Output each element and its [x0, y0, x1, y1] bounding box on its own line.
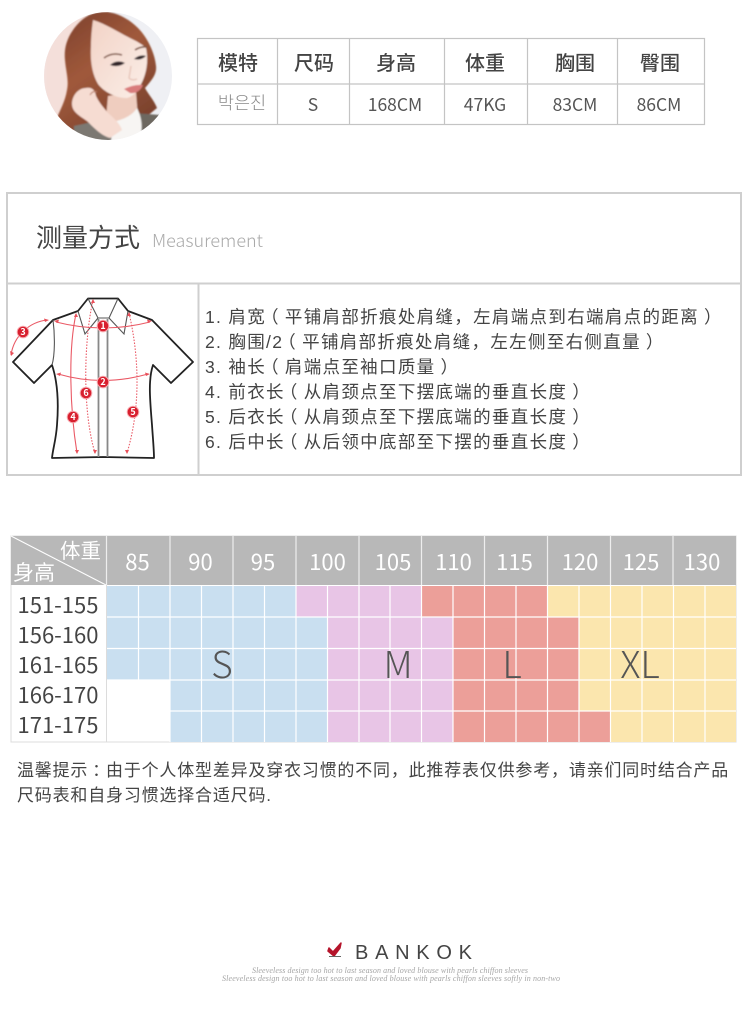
chart header: weight: 体重 [60, 534, 101, 564]
panel: measurement [7, 193, 741, 475]
brand logo: Sleeveless design too hot to last season and loved blouse with pearls chiffon sleeves [252, 966, 528, 975]
chart header: weight: 105 [375, 545, 411, 577]
table header row: 体重 [465, 47, 505, 76]
chart row labels: height: 151-155 [18, 588, 98, 620]
brand logo [222, 942, 560, 983]
zone: size L [422, 586, 610, 742]
table value row [218, 90, 681, 117]
measurement list: 3. 袖长（ 肩端点至袖口质量 ） [205, 357, 459, 377]
measurement list: 1. 肩宽（ 平铺肩部折痕处肩缝，左肩端点到右端肩点的距离 ） [205, 307, 723, 327]
shirt tweed right [140, 112, 159, 131]
chart row labels: height: 156-160 [18, 618, 98, 650]
table value row: S [308, 92, 318, 117]
chart row labels: height: 171-175 [18, 708, 98, 740]
chart row labels: height [18, 588, 98, 740]
diagram: shirt measurement points [10, 298, 193, 458]
brand logo: Sleeveless design too hot to last season and loved blouse with pearls chiffon sleeves softly in non-two [222, 974, 560, 983]
diagram: shirt measurement points: 1 [100, 319, 106, 332]
chart header: weight: 110 [435, 545, 472, 577]
chart header: weight: 90 [188, 545, 213, 577]
size letters: M [383, 635, 413, 689]
diagram: shirt measurement points: 3 [20, 325, 26, 338]
chart header: weight: 85 [125, 545, 150, 577]
chart header: weight [11, 534, 736, 587]
table header row [218, 47, 680, 76]
size letters [211, 635, 660, 689]
table header row: 模特 [218, 47, 258, 76]
zone: size S [107, 586, 327, 742]
size letters: L [502, 635, 522, 689]
measurement list: 4. 前衣长（ 从肩颈点至下摆底端的垂直长度 ） [205, 382, 591, 402]
chart header: weight: 115 [496, 545, 533, 577]
measurement list: 6. 后中长（ 从后领中底部至下摆的垂直长度 ） [205, 432, 591, 452]
table value row: 86CM [637, 92, 681, 117]
note text: 尺码表和自身习惯选择合适尺码. [17, 786, 271, 805]
heading: measurement: 测量方式 [36, 218, 140, 255]
table value row: 83CM [553, 92, 597, 117]
zone: size M [296, 586, 453, 742]
diagram: shirt measurement points: 6 [83, 386, 89, 399]
chart header: weight: 130 [684, 545, 720, 577]
size chart [11, 534, 736, 742]
table value row: 168CM [368, 92, 422, 117]
heading: measurement [36, 218, 264, 255]
shirt tweed left [73, 122, 112, 140]
hair [56, 12, 157, 132]
icon: check mark box [328, 943, 341, 956]
measurement list: 2. 胸围/2（ 平铺肩部折痕处肩缝，左左侧至右侧直量 ） [205, 332, 665, 352]
table header row: 臀围 [640, 47, 680, 76]
size letters: XL [620, 635, 660, 689]
table value row: 박은진 [218, 90, 266, 115]
heading: measurement: Measurement [152, 227, 264, 253]
table value row: 47KG [464, 92, 506, 117]
measurement list: 5. 后衣长（ 从肩颈点至下摆底端的垂直长度 ） [205, 407, 591, 427]
diagram: shirt measurement points: 5 [130, 405, 136, 418]
note text: 温馨提示：由于个人体型差异及穿衣习惯的不同，此推荐表仅供参考，请亲们同时结合产品 [17, 761, 729, 780]
chart header: weight: 100 [309, 545, 346, 577]
chart row labels: height: 166-170 [18, 678, 98, 710]
neck [106, 92, 138, 122]
brows and eyes [104, 47, 147, 58]
diagram: shirt measurement points: 2 [100, 375, 106, 388]
face [91, 20, 147, 98]
measurement list [205, 307, 723, 452]
model info table [198, 38, 704, 124]
chart header: weight: 125 [623, 545, 659, 577]
note text [17, 761, 729, 805]
chart header: weight: 身高 [13, 557, 55, 587]
brand logo: BANKOK [355, 942, 473, 964]
chart header: weight: 95 [251, 545, 275, 577]
size letters: S [211, 635, 233, 689]
diagram: shirt measurement points: 4 [70, 410, 76, 423]
chart header: weight: 120 [562, 545, 598, 577]
table header row: 尺码 [294, 47, 334, 76]
lace collar [112, 108, 142, 145]
table header row: 胸围 [555, 47, 595, 76]
zone: size XL [547, 586, 736, 742]
hand [72, 88, 122, 138]
chart row labels: height: 161-165 [18, 648, 98, 680]
model photo [44, 12, 172, 140]
lips [124, 85, 143, 93]
table header row: 身高 [376, 47, 416, 76]
